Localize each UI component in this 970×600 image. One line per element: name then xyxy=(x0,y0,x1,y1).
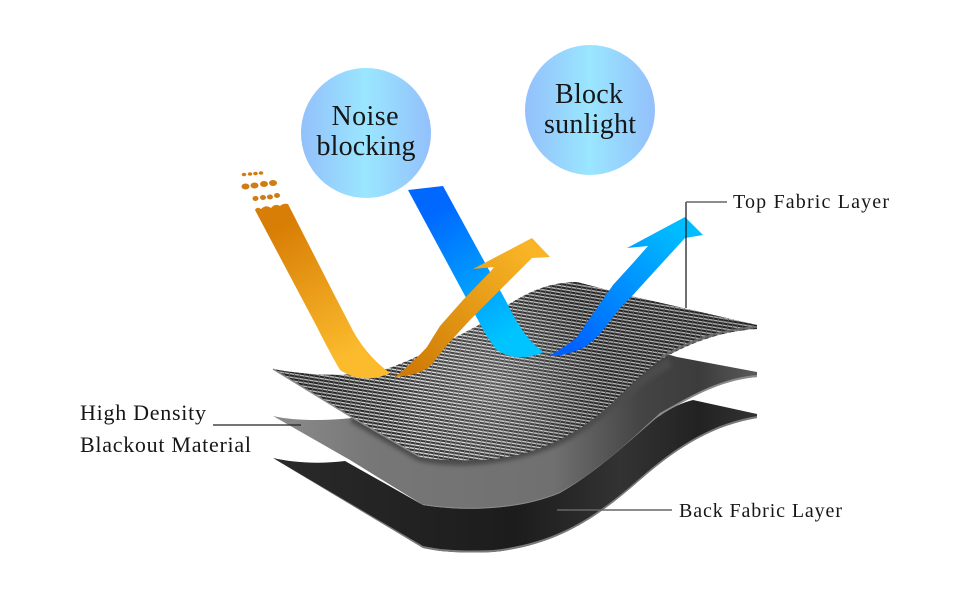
layer: high density blackout material xyxy=(273,352,757,509)
leader: top fabric layer xyxy=(686,202,727,308)
circle: noise blocking xyxy=(301,68,431,198)
arrow: orange noise reflected xyxy=(395,238,550,377)
leader: blackout material xyxy=(213,424,301,426)
arrow: blue sunlight incoming ribbon xyxy=(408,186,544,357)
label: back fabric layer: Back Fabric Layer xyxy=(679,500,842,522)
label: high density blackout material: Blackout Material xyxy=(80,432,251,457)
label: high density blackout material xyxy=(80,400,251,457)
layer: back fabric xyxy=(273,400,757,553)
icon: sound dots xyxy=(242,171,280,201)
leader: back fabric layer xyxy=(557,509,672,511)
circle: block sunlight: Block xyxy=(555,79,623,110)
arrow: orange noise incoming ribbon xyxy=(255,204,390,378)
infographic xyxy=(80,45,889,552)
circle: noise blocking: Noise xyxy=(332,101,398,132)
label: high density blackout material: High Density xyxy=(80,400,206,425)
layer: top fabric xyxy=(273,282,757,460)
arrow: blue sunlight reflected xyxy=(548,217,703,356)
circle: block sunlight: sunlight xyxy=(544,109,636,140)
label: top fabric layer: Top Fabric Layer xyxy=(733,191,889,213)
circle: block sunlight xyxy=(525,45,655,175)
circle: noise blocking: blocking xyxy=(316,131,416,162)
